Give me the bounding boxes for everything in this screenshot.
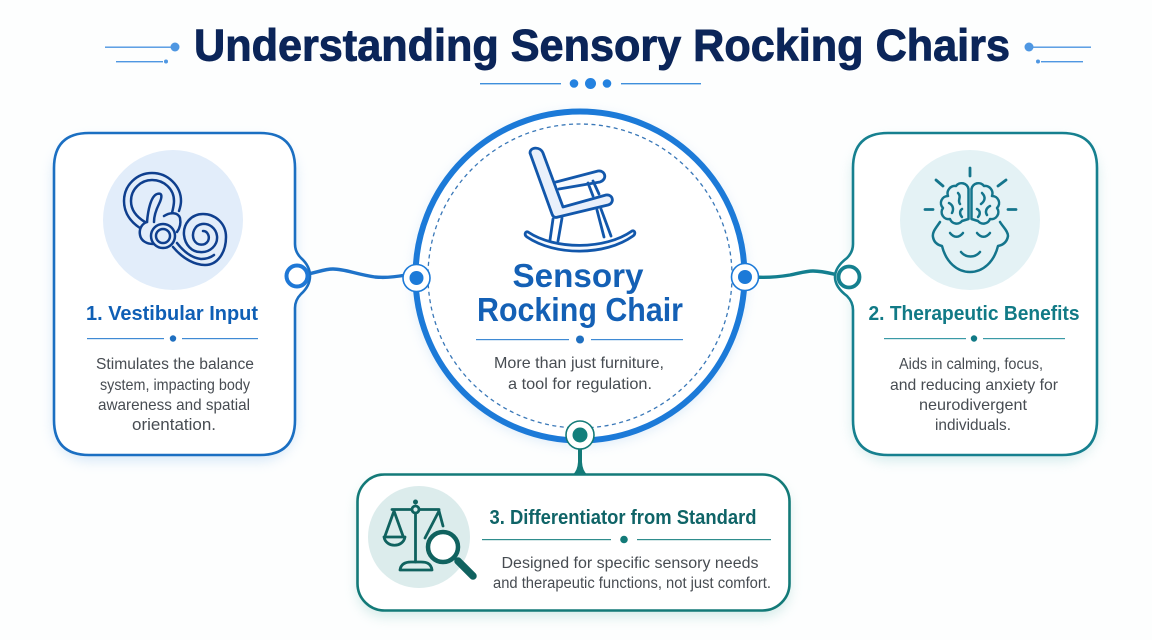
node: hub bottom xyxy=(566,421,594,449)
divider xyxy=(482,536,771,543)
body text: More than just furniture, xyxy=(494,355,664,372)
divider xyxy=(87,335,258,342)
hub: sensory rocking chair: Rocking Chair xyxy=(477,291,683,328)
body text: Stimulates the balance xyxy=(96,356,254,373)
panel: differentiator from standard xyxy=(357,474,790,617)
hub: sensory rocking chair xyxy=(414,112,746,445)
heading: 3. Differentiator from Standard xyxy=(490,507,756,529)
body text: neurodivergent xyxy=(919,397,1028,414)
connector: left card to hub xyxy=(308,269,406,277)
title: Understanding Sensory Rocking Chairs xyxy=(194,22,1010,70)
title ornament: left xyxy=(105,42,180,64)
body text xyxy=(493,555,771,592)
body text: system, impacting body xyxy=(100,377,250,394)
body text: awareness and spatial xyxy=(98,397,250,414)
body text xyxy=(494,355,664,393)
title ornament: centre dots xyxy=(480,78,701,89)
body text: a tool for regulation. xyxy=(508,376,652,393)
connector: hub to bottom panel xyxy=(573,445,587,475)
node: right card ring xyxy=(838,266,860,288)
connector: right card to hub xyxy=(754,271,838,277)
body text: Aids in calming, focus, xyxy=(899,356,1043,373)
body text: and therapeutic functions, not just comfort. xyxy=(493,575,771,592)
body text: and reducing anxiety for xyxy=(890,377,1059,394)
panel: therapeutic benefits xyxy=(835,133,1098,461)
icon: inner ear xyxy=(103,150,243,290)
icon: rocking chair xyxy=(525,148,635,251)
heading: 1. Vestibular Input xyxy=(86,303,258,325)
body text: orientation. xyxy=(132,416,216,434)
node: hub right xyxy=(732,264,758,290)
title ornament: right xyxy=(1024,42,1091,64)
icon: scales and magnifier xyxy=(368,486,473,588)
heading: 2. Therapeutic Benefits xyxy=(868,303,1080,325)
divider xyxy=(476,336,683,344)
body text xyxy=(890,356,1059,434)
node: hub left xyxy=(403,264,430,292)
divider xyxy=(884,335,1065,342)
node: left card ring xyxy=(286,266,308,286)
icon: calm head with brain xyxy=(900,150,1040,290)
heading: Sensory xyxy=(512,257,644,294)
body text xyxy=(96,356,254,434)
body text: Designed for specific sensory needs xyxy=(502,555,759,572)
panel: vestibular input xyxy=(53,133,310,461)
body text: individuals. xyxy=(935,417,1011,434)
